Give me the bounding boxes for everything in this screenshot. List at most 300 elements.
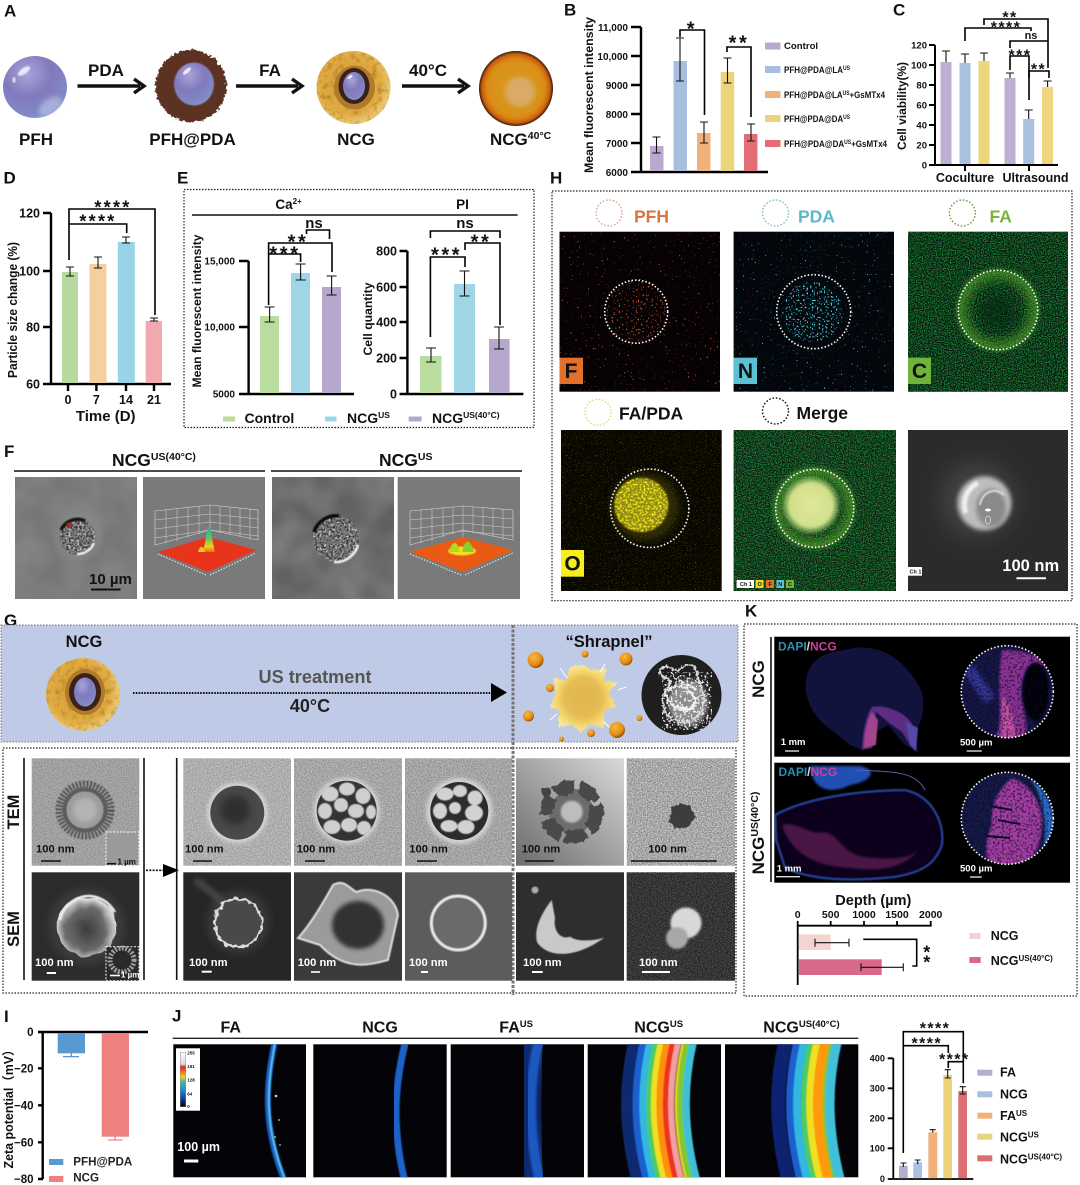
axes and tick labels: [911, 40, 1058, 172]
image: NCG fluorescence: [313, 1040, 447, 1182]
heading FA: [949, 200, 1012, 227]
inset circle: [961, 645, 1054, 740]
x axis labels: Coculture: [936, 171, 994, 185]
significance brackets: [680, 18, 751, 117]
scale label: 100 nm: [36, 844, 75, 856]
chart: intensity bars: [870, 1020, 1062, 1184]
panel E: Ca2+ and PI charts: [177, 168, 534, 428]
axes and tick labels: 21: [147, 393, 161, 407]
axes and tick labels: 60: [26, 378, 40, 392]
significance brackets: ****: [920, 1020, 950, 1038]
arrow: 40°C: 40°C: [409, 61, 447, 80]
image: C map: [908, 232, 1068, 392]
heading NCG US(40°C): NCG: [112, 450, 151, 470]
significance brackets: **: [1002, 10, 1018, 26]
significance brackets: ****: [94, 198, 132, 218]
chip Ch 1: Ch 1: [910, 570, 921, 576]
image: NCG US(40°C) section: 1 mm: [777, 864, 802, 875]
panel frame: [552, 191, 1072, 601]
column titles: NCG: [634, 1020, 670, 1037]
colour scale: 255: [187, 1050, 195, 1056]
axes and tick labels: 6000: [606, 168, 628, 179]
panel K: tumor penetration: [744, 624, 1077, 996]
chart: Ca2+: [190, 215, 354, 400]
significance brackets: [69, 198, 155, 315]
image: SEM series 1: 100 nm: [189, 957, 228, 969]
panel I: zeta potential chart: [2, 1007, 148, 1185]
heading PDA: PDA: [798, 207, 835, 227]
label NCG 40°C: 40°C: [528, 130, 552, 142]
significance brackets: **: [729, 32, 749, 54]
image: NCG US(40°C) section: 500 µm: [960, 864, 992, 875]
heading FA/PDA: FA/PDA: [619, 403, 684, 423]
chart: depth: [795, 893, 1053, 985]
axes and tick labels: [597, 23, 768, 179]
bars: [62, 242, 162, 383]
axes and tick labels: 0: [390, 388, 397, 402]
significance brackets: *: [687, 18, 697, 40]
image: TEM series 1: 100 nm: [185, 844, 224, 856]
error bars: [652, 38, 755, 153]
image: NCG section: [774, 637, 1070, 757]
heading FA: FA: [990, 207, 1012, 227]
legend: US(40°C): [1028, 1152, 1062, 1161]
image: 3D intensity plot, NCG US(40°C): [143, 477, 265, 599]
axes and tick labels: 5000: [213, 390, 235, 400]
scale label: 100 nm: [35, 957, 74, 969]
significance brackets: ns: [456, 215, 474, 232]
heading PFH: PFH: [634, 207, 669, 227]
x axis labels: Ultrasound: [1003, 171, 1068, 185]
legend: [977, 1066, 1062, 1166]
panel G bottom: TEM and SEM time series: [3, 625, 736, 995]
y axis title: Particle size change (%): [6, 242, 20, 378]
legend: US: [843, 115, 850, 121]
legend: US: [843, 66, 850, 72]
legend: +GsMTx4: [851, 139, 888, 150]
legend: NCG: [73, 1172, 99, 1185]
axes and tick labels: 80: [916, 80, 927, 92]
label Shrapnel: “Shrapnel”: [565, 633, 653, 651]
legend chips: F: [768, 582, 772, 588]
axes and tick labels: 0: [65, 393, 72, 407]
legend: NCG: [347, 410, 378, 426]
significance brackets: ****: [991, 20, 1021, 36]
legend: US(40°C): [1018, 954, 1053, 963]
heading PDA: [762, 200, 835, 227]
image: NCG section: 500 µm: [960, 738, 992, 749]
label NCG 40°C: NCG: [490, 130, 528, 149]
column titles: NCG: [362, 1020, 398, 1037]
panel letter D: D: [4, 168, 16, 188]
y axis title: Cell quantity: [363, 282, 375, 356]
significance brackets: [430, 215, 500, 337]
legend: US(40°C): [463, 410, 500, 420]
column rules: [24, 758, 177, 980]
panel letter C: C: [893, 0, 905, 20]
column titles: FA: [220, 1020, 241, 1037]
axes and tick labels: 20: [916, 140, 927, 152]
axes and tick labels: [870, 1054, 973, 1184]
axes and tick labels: 400: [376, 316, 397, 330]
heading NCG US(40°C): US(40°C): [151, 451, 196, 463]
error bars: [900, 1070, 966, 1167]
significance brackets: **: [1031, 62, 1046, 78]
image: SEM series 2: 100 nm: [298, 957, 336, 969]
legend: [49, 1156, 133, 1185]
column titles: NCG: [763, 1020, 799, 1037]
axes and tick labels: 200: [870, 1114, 885, 1124]
panel frame: [3, 748, 736, 993]
image: merge map: [734, 430, 896, 591]
label TEM: TEM: [5, 795, 23, 829]
axes and tick labels: 120: [911, 40, 927, 52]
label PFH: PFH: [19, 130, 53, 149]
image: TEM series 1: [183, 758, 291, 866]
axes and tick labels: [795, 909, 943, 985]
significance brackets: [269, 215, 332, 305]
heading Merge: [762, 398, 848, 424]
axes and tick labels: [19, 206, 171, 407]
image: NCG US(40°C) section: DAPI/NCG: [778, 765, 837, 779]
significance bracket: *: [923, 952, 930, 972]
arrow: FA: [236, 61, 302, 93]
panel C: cell viability chart: [893, 0, 1068, 185]
significance bracket: *: [923, 942, 930, 962]
vertical rule: [770, 637, 772, 882]
axes and tick labels: 1000: [852, 909, 876, 921]
scale label 100 µm: 100 µm: [177, 1140, 220, 1154]
significance brackets: [903, 1020, 970, 1153]
axes and tick labels: 9000: [606, 81, 628, 92]
icon: exploded shell: [550, 664, 626, 732]
image: SEM series 3: 100 nm: [409, 957, 448, 969]
column titles: US(40°C): [799, 1019, 840, 1030]
legend: [765, 41, 888, 150]
legend: Control: [784, 41, 818, 52]
panel F: cell imaging and 3D plots: [4, 442, 522, 599]
image: SEM series 5: [627, 872, 735, 981]
y axis title: Mean fluorescent intensity: [582, 17, 596, 173]
image: NCG US(40°C) fluorescence: [725, 1039, 858, 1182]
axes and tick labels: 0: [922, 160, 927, 172]
scale label 100 µm: [177, 1140, 220, 1162]
column titles: US: [670, 1019, 683, 1030]
heading FA/PDA: [585, 399, 684, 425]
arrow: US treatment 40°C: US treatment: [258, 666, 372, 687]
legend: NCG: [991, 929, 1018, 943]
significance brackets: [965, 10, 1049, 100]
axes and tick labels: 10,000: [597, 52, 628, 63]
colour scale: 0: [187, 1104, 190, 1109]
axes and tick labels: 800: [376, 244, 397, 258]
image: FA fluorescence: [173, 1040, 306, 1182]
image: TEM series 4: [516, 758, 624, 866]
axes and tick labels: 0: [27, 1027, 34, 1039]
header rule: [173, 1037, 858, 1039]
panel D: particle size change chart: [4, 168, 171, 425]
error bars: [426, 271, 504, 362]
label NCG: NCG: [66, 633, 102, 651]
axes and tick labels: 0: [880, 1174, 885, 1184]
bars: [650, 61, 758, 171]
image: cell, NCG US: [272, 477, 394, 599]
badge N: [734, 358, 757, 384]
legend: Control: [244, 410, 294, 426]
significance brackets: ****: [79, 212, 117, 232]
arrow: PDA: PDA: [88, 61, 124, 80]
legend: FA: [1000, 1066, 1016, 1080]
bars: [420, 284, 510, 393]
inset circle: [961, 772, 1054, 868]
blue panel background: [1, 625, 738, 742]
legend: [969, 929, 1053, 968]
legend: US: [843, 91, 850, 97]
y axis title: Mean fluorescent intensity: [190, 234, 204, 388]
legend: US: [1016, 1109, 1028, 1118]
bars: [260, 273, 341, 393]
legend chips: O: [758, 582, 762, 588]
icons: orange balls: [523, 650, 642, 742]
arrow: FA: FA: [259, 61, 281, 80]
chip Ch 1: [908, 567, 922, 576]
scale label: 100 nm: [1002, 557, 1059, 575]
axes and tick labels: 7000: [606, 139, 628, 150]
image: N map: [734, 232, 894, 392]
inset: 1 µm SEM: 1 µm: [121, 970, 139, 980]
axes and tick labels: 100: [911, 60, 927, 72]
legend chips: N: [778, 582, 782, 588]
badge F: F: [565, 360, 578, 383]
heading NCG US: US: [418, 451, 432, 463]
axes and tick labels: 40: [916, 120, 927, 132]
axes and tick labels: [204, 256, 354, 400]
arrow: 40°C: [402, 61, 468, 93]
image: SEM series 5: 100 nm: [639, 957, 678, 969]
axes and tick labels: 120: [19, 206, 40, 220]
label NCG US(40°C) rotated: US(40°C): [749, 792, 761, 837]
axes and tick labels: 15,000: [204, 256, 235, 268]
axes and tick labels: [14, 1027, 148, 1185]
badge C: [908, 358, 931, 384]
image: SEM start: [32, 872, 139, 981]
legend: [223, 410, 500, 426]
image: TEM series 3: 100 nm: [409, 844, 448, 856]
column titles: FA: [499, 1020, 520, 1037]
image: SEM series 4: 100 nm: [523, 957, 562, 969]
axes and tick labels: −40: [14, 1100, 34, 1112]
label NCG US(40°C) rotated: NCG: [749, 837, 768, 874]
error bars: [815, 939, 903, 971]
axes and tick labels: 60: [916, 100, 927, 112]
legend: NCG: [432, 410, 463, 426]
arrow: dotted to series: [146, 864, 179, 877]
label NCG: NCG: [337, 130, 375, 149]
icon: PFH sphere: [3, 56, 67, 119]
column titles: [220, 1019, 840, 1037]
header rule and labels: [192, 197, 518, 215]
label PFH@PDA: PFH@PDA: [149, 130, 236, 149]
inset: 1 µm TEM: 1 µm: [118, 858, 136, 866]
legend: PFH@PDA@LA: [784, 90, 855, 101]
axes and tick labels: 1500: [885, 909, 909, 921]
panel letter H: H: [550, 168, 562, 188]
image: TEM series 5: [627, 758, 735, 866]
image: 3D intensity plot, NCG US: [398, 477, 520, 599]
legend: FA: [1000, 1109, 1016, 1123]
y axis title: Cell viability(%): [895, 62, 909, 150]
chart: PI: [363, 215, 523, 402]
significance brackets: ***: [1009, 48, 1031, 64]
legend chips: [737, 580, 794, 588]
legend: US: [378, 410, 390, 420]
arrow: PDA: [78, 61, 144, 93]
panel frame: [184, 190, 534, 428]
axes and tick labels: 400: [870, 1054, 885, 1064]
panel frame: [744, 624, 1077, 996]
image: F map: [560, 232, 720, 392]
axes and tick labels: 100: [19, 264, 40, 278]
significance brackets: ns: [1025, 30, 1037, 42]
image: shrapnel SEM circle: [642, 655, 722, 735]
panel H: elemental mapping: [552, 191, 1072, 601]
panel G top: US treatment scheme: [1, 625, 738, 742]
colour scale: [176, 1048, 200, 1111]
legend: +GsMTx4: [850, 90, 886, 101]
axes and tick labels: 100: [870, 1144, 885, 1154]
significance bracket: [863, 939, 930, 972]
axes and tick labels: 0: [795, 909, 801, 921]
image: TEM series 4: 100 nm: [522, 844, 560, 856]
legend: PFH@PDA@DA: [784, 139, 856, 150]
image: TEM series 2: 100 nm: [297, 844, 335, 856]
header rule and labels: 2+: [293, 197, 302, 206]
significance brackets: ****: [911, 1036, 942, 1052]
error bars: [265, 264, 337, 322]
icon: NCG particle: [316, 50, 392, 126]
heading Merge: Merge: [796, 403, 848, 423]
axes and tick labels: 11,000: [598, 23, 628, 34]
icon: NCG particle: [46, 658, 120, 731]
axes and tick labels: 500: [822, 909, 840, 921]
legend: PFH@PDA@DA: [784, 114, 856, 125]
image: FA US fluorescence: [451, 1040, 584, 1182]
image: SEM series 2: [294, 872, 402, 981]
x axis title: Time (D): [76, 408, 136, 425]
divider: [512, 625, 514, 995]
panel B: mean fluorescent intensity chart: [564, 0, 888, 179]
column titles: US: [520, 1019, 533, 1030]
legend chips: C: [788, 582, 792, 588]
legend chips: Ch 1: [740, 582, 752, 588]
colour scale: 128: [187, 1078, 195, 1082]
panel J: fluorescence penetration: [172, 1007, 1062, 1184]
axes and tick labels: [376, 244, 523, 402]
icon: NCG 40°C particle: [479, 51, 553, 126]
axes and tick labels: 7: [93, 393, 100, 407]
x axis labels: [936, 171, 1068, 185]
panel A: synthesis scheme: [3, 2, 553, 149]
significance brackets: ***: [269, 244, 301, 266]
axes and tick labels: 2000: [919, 909, 943, 921]
legend: US: [1028, 1131, 1040, 1140]
legend: NCG: [1000, 1087, 1028, 1101]
badge N: N: [738, 360, 753, 383]
image: SEM series 1: [183, 872, 291, 981]
panel letter I: I: [4, 1007, 9, 1026]
header rule and labels: Ca: [275, 197, 293, 212]
error bars: [942, 51, 1052, 119]
arrow: US treatment 40°C: [133, 666, 507, 716]
arrow: US treatment 40°C: 40°C: [290, 696, 330, 716]
axes and tick labels: −20: [14, 1064, 34, 1076]
axes and tick labels: 8000: [606, 110, 628, 121]
panel letter K: K: [745, 602, 758, 620]
label SEM: SEM: [5, 911, 23, 947]
badge F: [560, 358, 583, 384]
chart title: Depth (µm): [835, 893, 911, 909]
legend: NCG: [1000, 1131, 1028, 1145]
image: SEM series 4: [516, 872, 624, 981]
axes and tick labels: 14: [119, 393, 133, 407]
icon: PFH@PDA particle: [156, 50, 226, 122]
image: SEM series 3: [405, 872, 512, 981]
image: NCG section: 1 mm: [781, 737, 806, 748]
panel letter B: B: [564, 0, 576, 20]
badge O: [561, 550, 584, 577]
image: TEM series 5: 100 nm: [648, 844, 687, 856]
legend: US: [844, 140, 851, 146]
error bars: [63, 1053, 79, 1057]
axes and tick labels: −60: [14, 1138, 34, 1150]
label NCG rotated: NCG: [749, 660, 768, 698]
image: NCG US(40°C) section: [774, 763, 1070, 883]
significance brackets: **: [471, 232, 491, 254]
axes and tick labels: 10,000: [204, 322, 235, 334]
legend: PFH@PDA@LA: [784, 65, 855, 76]
panel letter F: F: [4, 442, 14, 461]
badge O: O: [564, 552, 581, 576]
heading NCG US(40°C): [14, 450, 265, 471]
image: TEM series 2: [294, 758, 402, 866]
scale label 10 µm: 10 µm: [89, 571, 132, 588]
axes and tick labels: 300: [870, 1084, 885, 1094]
bars: [799, 934, 882, 975]
heading NCG US: NCG: [379, 450, 418, 470]
axes and tick labels: 200: [376, 352, 397, 366]
image: NCG section: DAPI/NCG: [778, 640, 837, 654]
legend: NCG: [1000, 1152, 1028, 1166]
colour scale: 191: [187, 1064, 195, 1069]
panel letter G: G: [4, 611, 17, 630]
legend: NCG: [991, 954, 1018, 968]
significance brackets: ns: [305, 215, 323, 232]
panel letter A: A: [4, 2, 16, 20]
y axis title: Zeta potential（mV）: [2, 1044, 16, 1168]
image: TEM series 3: [405, 758, 512, 866]
panel letter J: J: [172, 1007, 181, 1026]
bars: [899, 1075, 967, 1178]
axes and tick labels: 600: [376, 280, 397, 294]
image: NCG US fluorescence: [588, 1039, 721, 1182]
error bars: [66, 237, 158, 321]
header rule and labels: PI: [456, 197, 469, 212]
bars: [58, 1033, 129, 1137]
significance brackets: ***: [431, 244, 462, 266]
legend: PFH@PDA: [73, 1156, 133, 1169]
bars: [940, 61, 1053, 164]
badge C: C: [912, 360, 927, 383]
